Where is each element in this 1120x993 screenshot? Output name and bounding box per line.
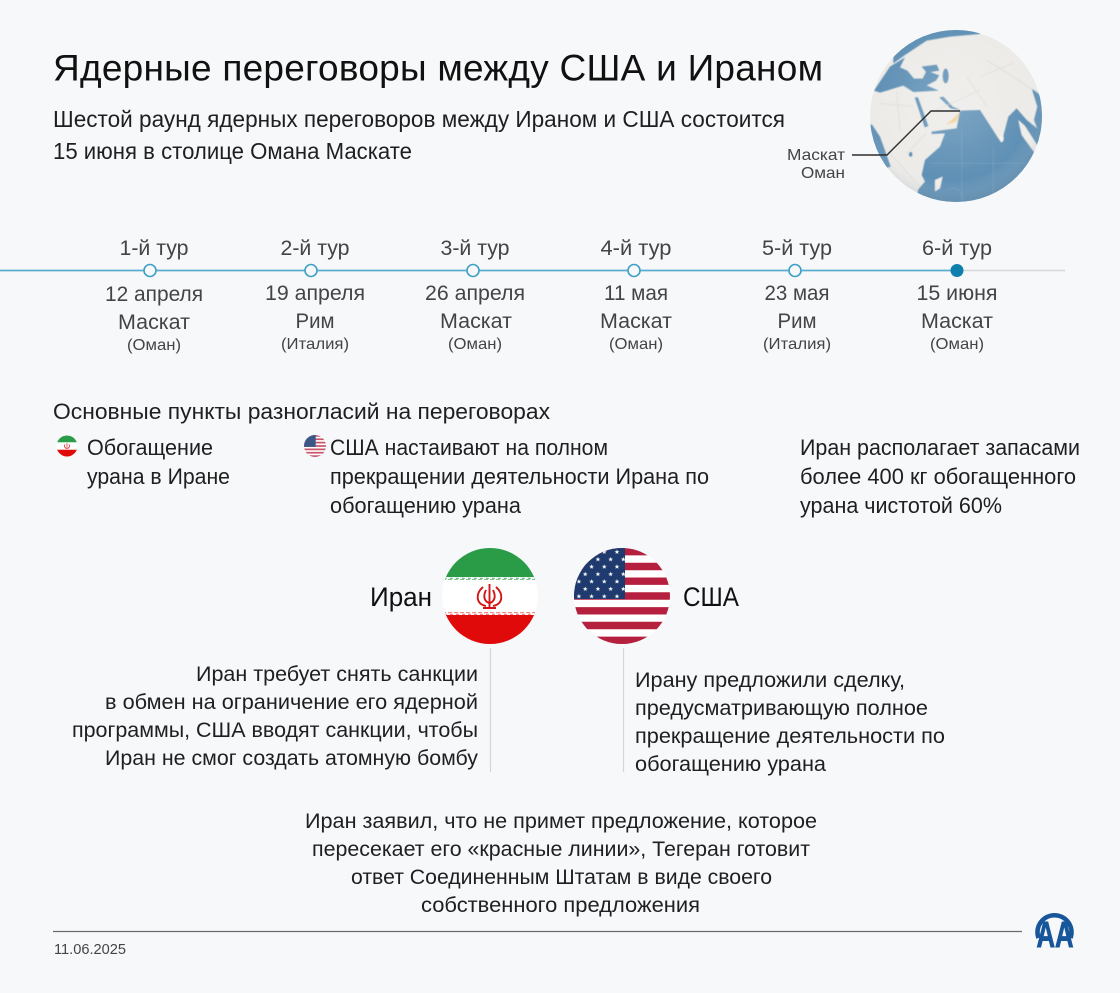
point: uranium stockpile [800, 435, 1080, 518]
round 3: (Оман) [448, 336, 502, 353]
round 5: (Италия) [763, 336, 831, 353]
conclusion text [305, 810, 817, 917]
footer rule [53, 930, 1022, 932]
Iran position text: программы, США вводят санкции, чтобы [72, 719, 478, 742]
round 5 [762, 237, 832, 353]
round 6: 6-й тур [922, 237, 992, 260]
round 4: 11 мая [604, 282, 668, 305]
round 1: 1-й тур [120, 237, 188, 260]
conclusion text: собственного предложения [421, 894, 700, 917]
round 3: 3-й тур [440, 237, 510, 260]
timeline axis [0, 270, 1065, 272]
round 2: 2-й тур [280, 237, 350, 260]
point: uranium stockpile: Иран располагает запасами [800, 435, 1080, 460]
USA position text: прекращение деятельности по [635, 725, 945, 748]
logo: Anadolu Agency: AA [1036, 914, 1074, 955]
subtitle: 15 июня в столице Омана Маскате [53, 138, 412, 164]
conclusion text: пересекает его «красные линии», Тегеран готовит [312, 838, 810, 861]
USA position text: предусматривающую полное [635, 697, 928, 720]
point: uranium stockpile: более 400 кг обогащенного [800, 464, 1076, 489]
round 6: 15 июня [916, 282, 998, 305]
round 4 [600, 237, 672, 353]
round 1: (Оман) [127, 337, 181, 354]
point: enrichment in Iran: урана в Иране [87, 464, 230, 489]
round 2 [265, 237, 365, 353]
icon: small Iran flag [56, 435, 78, 457]
USA position text [624, 648, 945, 776]
point: enrichment in Iran [87, 435, 230, 489]
round 6: Маскат [921, 310, 993, 333]
round 1: 12 апреля [105, 283, 203, 306]
map callout: Muscat, Oman: Маскат [787, 147, 846, 164]
round 4: 4-й тур [600, 237, 672, 260]
map callout: Muscat, Oman [787, 111, 960, 182]
point: US position: США настаивают на полном [330, 435, 608, 460]
round 5: 5-й тур [762, 237, 832, 260]
Iran position text [72, 648, 490, 772]
title: Ядерные переговоры между США и Ираном [53, 48, 823, 88]
round 3: Маскат [440, 310, 512, 333]
point: US position [330, 435, 709, 518]
subtitle [53, 106, 785, 164]
icon: USA flag [574, 548, 670, 644]
round 2: (Италия) [281, 336, 349, 353]
date: 11.06.2025 [54, 942, 126, 958]
point: US position: прекращении деятельности Ирана по [330, 464, 709, 489]
round 4: (Оман) [609, 336, 663, 353]
USA position text: Ирану предложили сделку, [635, 669, 905, 692]
USA label: США [683, 582, 739, 612]
Iran position text: Иран требует снять санкции [196, 663, 478, 686]
icon: Iran flag [442, 548, 538, 644]
round 5: 23 мая [764, 282, 830, 305]
conclusion text: Иран заявил, что не примет предложение, которое [305, 810, 817, 833]
icon: small USA flag [304, 435, 326, 457]
round 2: Рим [296, 310, 334, 333]
subtitle: Шестой раунд ядерных переговоров между Ираном и США состоится [53, 106, 785, 132]
globe map [870, 30, 1042, 202]
map callout: Muscat, Oman: Оман [801, 165, 845, 182]
round 1: Маскат [118, 311, 190, 334]
round 3 [425, 237, 525, 353]
round 6: (Оман) [930, 336, 984, 353]
point: enrichment in Iran: Обогащение [87, 435, 213, 460]
conclusion text: ответ Соединенным Штатам в виде своего [351, 866, 772, 889]
Iran position text: в обмен на ограничение его ядерной [105, 691, 478, 714]
Iran label: Иран [370, 582, 432, 612]
round 1 [105, 237, 203, 354]
section heading: Основные пункты разногласий на переговорах [53, 399, 550, 424]
round 5: Рим [778, 310, 816, 333]
point: US position: обогащению урана [330, 493, 522, 518]
Iran position text: Иран не смог создать атомную бомбу [105, 747, 478, 770]
round 2: 19 апреля [265, 282, 365, 305]
round 3: 26 апреля [425, 282, 525, 305]
round 4: Маскат [600, 310, 672, 333]
point: uranium stockpile: урана чистотой 60% [800, 493, 1002, 518]
round 6 [916, 237, 998, 353]
USA position text: обогащению урана [635, 753, 826, 776]
